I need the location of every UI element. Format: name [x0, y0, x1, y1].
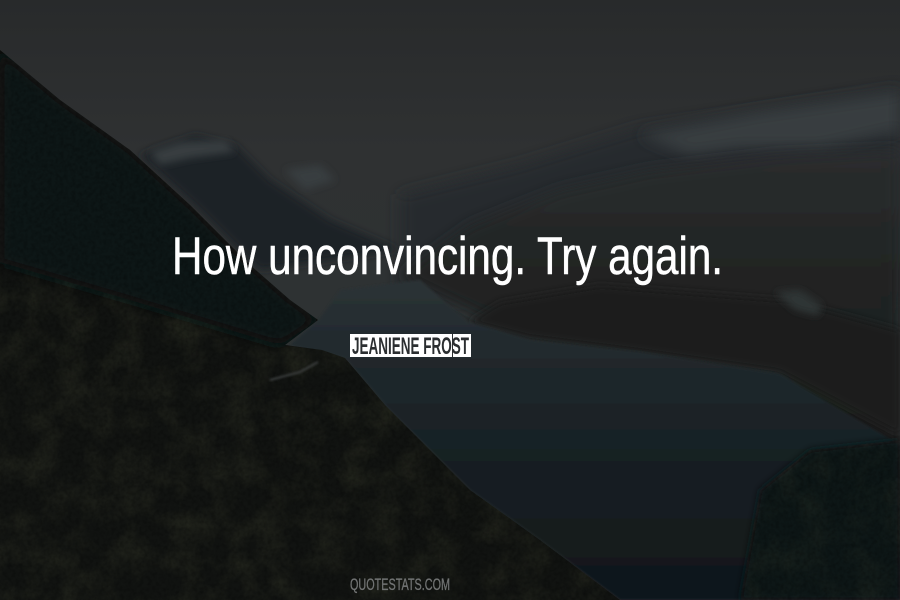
left mountain foreground — [0, 50, 620, 600]
snow patches on right slope — [775, 290, 822, 316]
water — [290, 280, 900, 600]
quote text: How unconvincing. Try again. — [172, 227, 723, 286]
far snowy mountains left — [140, 135, 400, 270]
right forested slope — [400, 150, 900, 600]
right foreground trees — [740, 440, 900, 600]
far mountain range right with snow — [400, 88, 900, 300]
road — [270, 362, 318, 380]
watermark: quotestats.com: QUOTESTATS.COM — [350, 575, 450, 594]
